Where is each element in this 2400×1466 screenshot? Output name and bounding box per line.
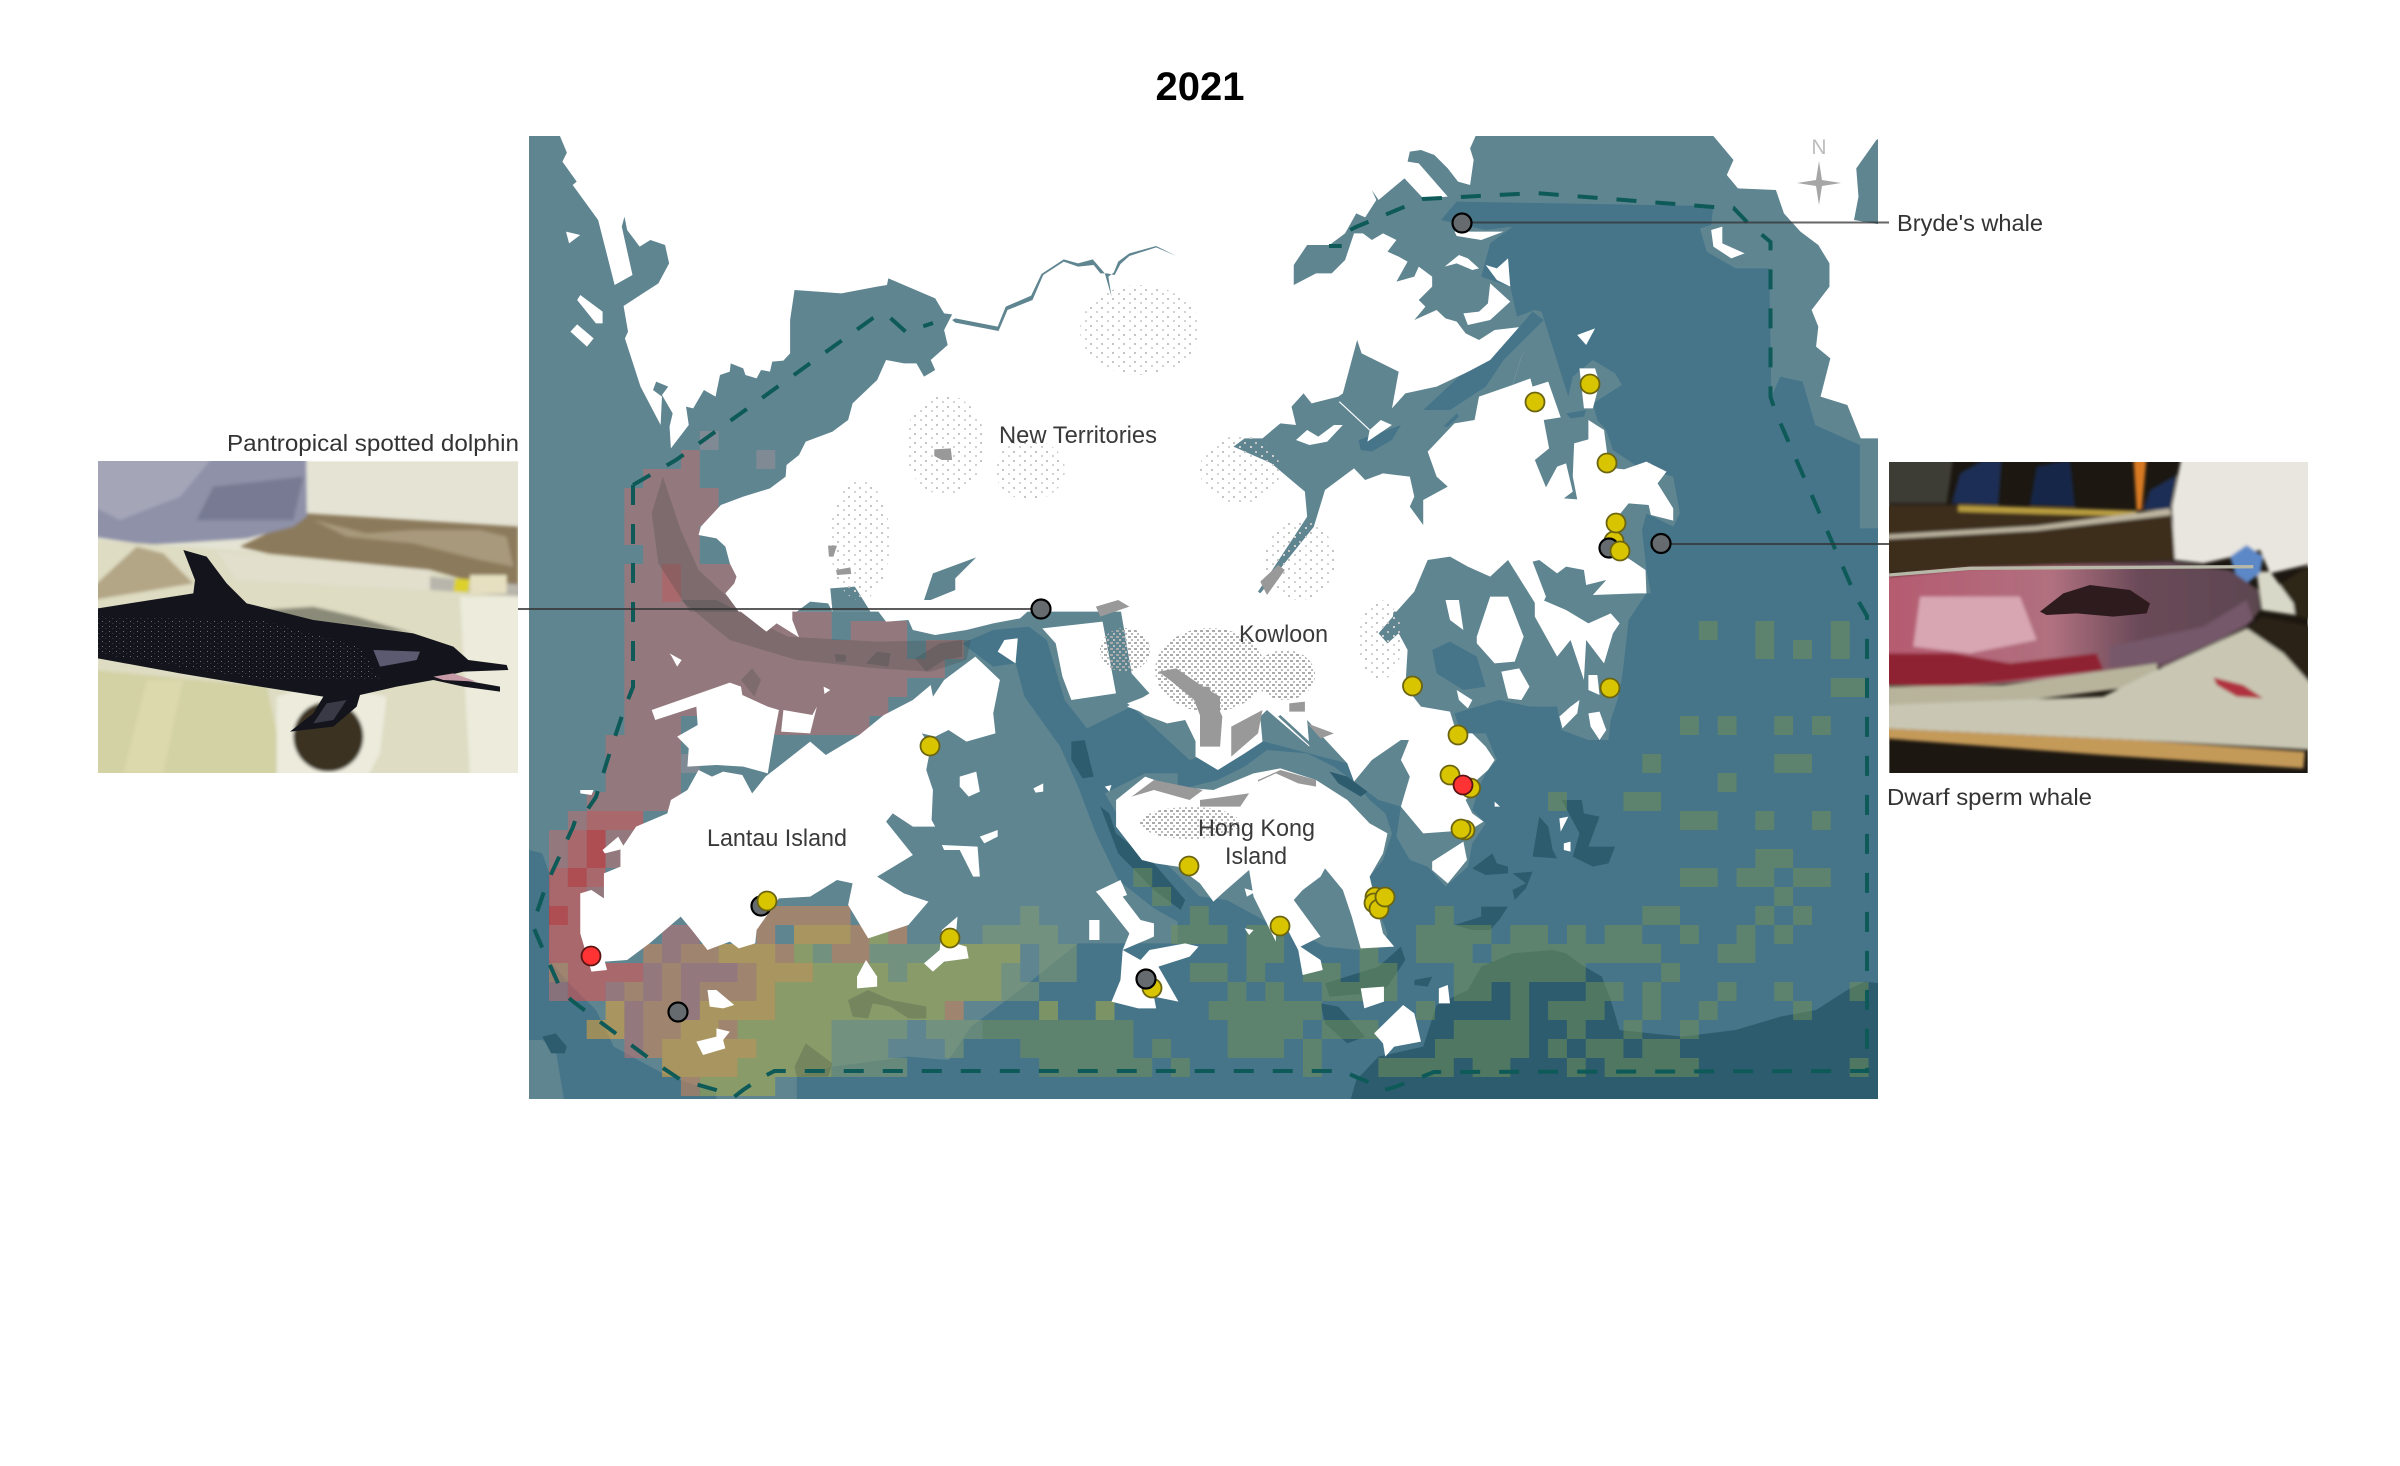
rivers and reservoirs: [797, 246, 1176, 612]
stranding markers: [582, 214, 1670, 1022]
land: Kowloon and Clear Water Bay: [1196, 592, 1495, 833]
habitat density grid: [549, 431, 1868, 1096]
label: Hong Kong Island: [1198, 815, 1315, 870]
land: south-west New Territories: [740, 612, 1196, 742]
connector: dwarf sperm whale: [1661, 543, 1889, 545]
species label: Pantropical spotted dolphin: Pantropical spotted dolphin: [227, 430, 519, 456]
north-east corner water: [1854, 139, 1878, 224]
Tolo Harbour deep channel: [1358, 312, 1586, 452]
species label: Dwarf sperm whale: Dwarf sperm whale: [1887, 784, 2092, 810]
connector: Bryde's whale: [1462, 222, 1889, 224]
yellow markers on top of grey: [758, 542, 1630, 910]
label: Lantau Island: Lantau Island: [707, 825, 847, 852]
label: Hong Kong Island: Island: [1225, 843, 1287, 870]
grey markers: [668, 214, 1670, 1022]
label: Hong Kong Island: Hong Kong: [1198, 815, 1315, 842]
darker plume over Lantau waters: [652, 477, 971, 1077]
management boundary dashed line: [532, 193, 1867, 1097]
yellow markers: [920, 374, 1626, 998]
Tolo Harbour water: [1233, 320, 1542, 593]
grid: grey-green cells: [813, 906, 1077, 1077]
title: 2021: [1156, 65, 1244, 109]
Shing Mun channel: [1258, 527, 1314, 593]
land: north-east New Territories and Sai Kung: [1200, 133, 1673, 612]
grid: olive cells: [700, 925, 1114, 1096]
land: Hong Kong Island: [1116, 768, 1394, 975]
shallow water background: [529, 136, 1878, 1099]
dense urban footprints: [1100, 628, 1315, 839]
label: New Territories: New Territories: [999, 422, 1157, 449]
land: eastern and southern islands: [1245, 597, 1620, 1057]
label: Kowloon: Kowloon: [1239, 621, 1328, 648]
map of Hong Kong waters: [529, 133, 1883, 1103]
deep water layers: [529, 202, 1881, 1103]
grid: eastern low density cells: [983, 621, 1868, 1077]
Kai Tak runway gap: [1278, 715, 1311, 747]
red markers: [582, 776, 1472, 966]
place labels: [707, 422, 1328, 870]
grid: moderate mauve cells: [549, 450, 964, 1058]
grid: brown cells: [549, 906, 964, 1096]
grid: mustard cells: [587, 925, 851, 1077]
land: Lantau Island and western islands: [580, 622, 1199, 1055]
grid: low density cells: [681, 431, 775, 773]
north compass: N: [1811, 136, 1827, 159]
land: north-west and New Territories: [559, 133, 1221, 612]
darker seabed channel features: [542, 740, 1881, 1103]
north compass: [1797, 136, 1841, 205]
photo: pantropical spotted dolphin: [93, 457, 523, 778]
land: islands in the north-east waters: [1296, 227, 1745, 445]
land: islands in north-west waters: [566, 232, 603, 347]
photo: dwarf sperm whale: [1883, 457, 2313, 773]
land: far north-east shore: [1711, 133, 1883, 438]
connector: dolphin photo to stranding point: [518, 608, 1041, 610]
species label: Bryde's whale: Bryde's whale: [1897, 210, 2043, 236]
urban grey blocks: [828, 448, 1334, 807]
building footprints scattered: [830, 285, 1402, 680]
grid: highest red cells: [549, 830, 606, 925]
grid: high red cells: [549, 564, 681, 1001]
